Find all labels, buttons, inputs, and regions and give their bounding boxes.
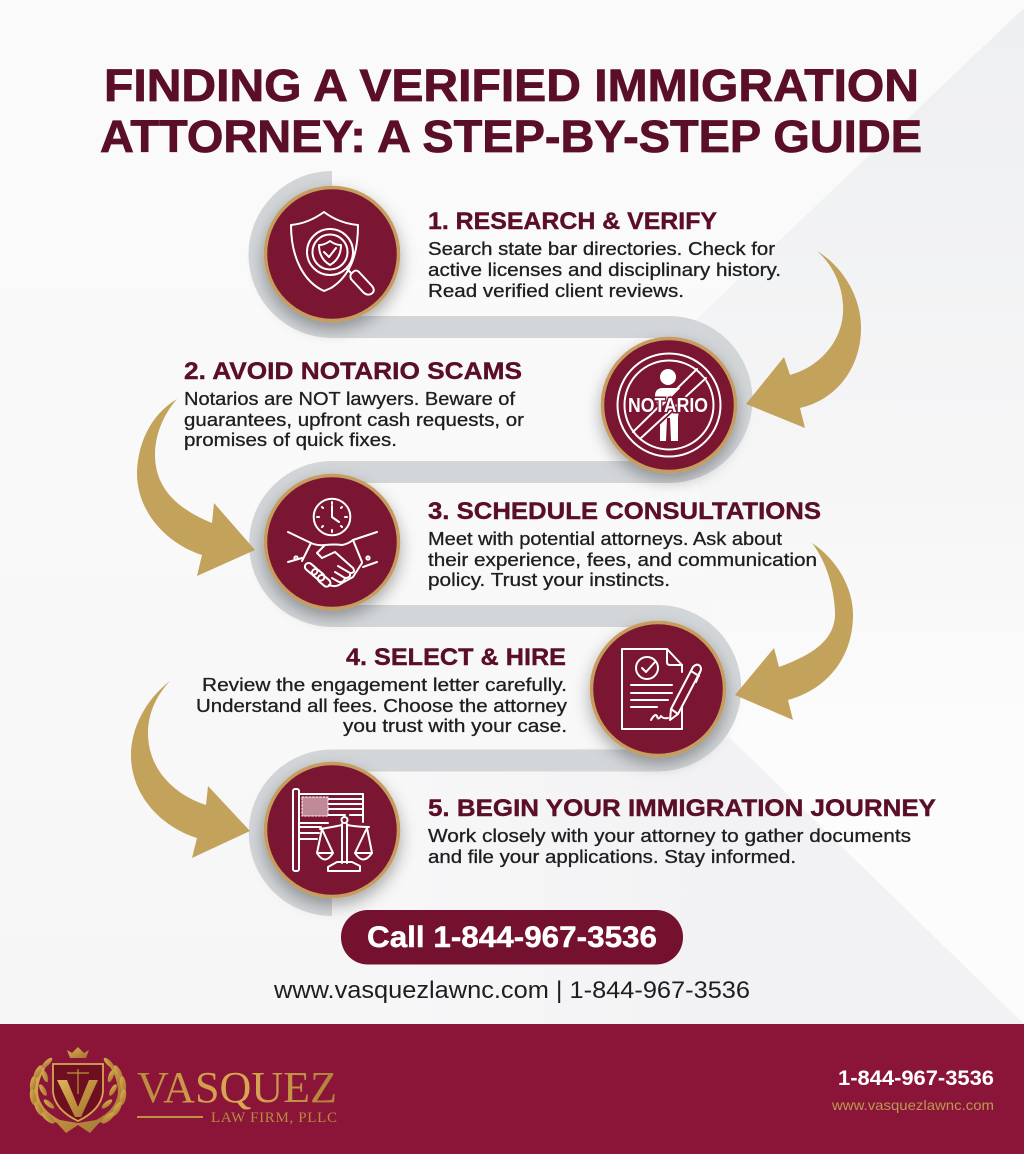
step 2 text: guarantees, upfront cash requests, or [184,409,524,430]
step 1 text: 1. RESEARCH & VERIFY [428,208,717,235]
footer phone: 1-844-967-3536 [838,1067,994,1090]
step 5 badge [266,764,398,896]
arrow: step 3 to step 4 [735,543,853,720]
icon: flag and scales of justice [293,789,372,871]
step 3 text: Meet with potential attorneys. Ask about [428,528,782,549]
title [100,60,922,162]
step 3 text: 3. SCHEDULE CONSULTATIONS [428,498,821,525]
arrow: step 4 to step 5 [131,681,250,858]
logo wordmark: VASQUEZ [137,1063,337,1112]
logo: Vasquez Law Firm crest [29,1047,127,1133]
footer website: www.vasquezlawnc.com [831,1097,994,1113]
footer band [0,1024,1024,1154]
step 4 text: you trust with your case. [343,715,567,736]
step 2 text: 2. AVOID NOTARIO SCAMS [184,358,522,385]
step 1 text: Read verified client reviews. [428,280,684,301]
step 1 text [428,208,781,301]
winding grey path track [260,182,742,905]
call button: Call 1-844-967-3536 [367,921,657,954]
arrow: step 1 to step 2 [746,251,861,428]
icon: shield with magnifier [291,212,374,295]
step 1 badge [266,188,398,320]
step 4 text: Understand all fees. Choose the attorney [196,695,568,716]
logo wordmark: LAW FIRM, PLLC [211,1110,337,1126]
step 2 text: Notarios are NOT lawyers. Beware of [184,388,516,409]
shield [53,1064,103,1121]
step 5 text [428,795,936,867]
crown [67,1047,89,1058]
step 3 text: their experience, fees, and communication [428,549,817,570]
contact line: www.vasquezlawnc.com | 1-844-967-3536 [273,977,750,1004]
step 2 badge [602,338,736,472]
step 2 text [184,358,524,450]
icon: no notario: NOTARIO [628,394,708,417]
title: FINDING A VERIFIED IMMIGRATION [104,60,919,111]
arrow: step 2 to step 3 [137,399,255,576]
icon: clock and handshake [288,499,377,588]
step 3 text [428,498,821,590]
step 1 text: active licenses and disciplinary history. [428,259,781,280]
title: ATTORNEY: A STEP-BY-STEP GUIDE [100,111,922,162]
step 1 text: Search state bar directories. Check for [428,238,775,259]
step 3 text: policy. Trust your instincts. [428,569,670,590]
step 5 text: 5. BEGIN YOUR IMMIGRATION JOURNEY [428,795,936,822]
step 3 badge [266,476,398,608]
step 2 text: promises of quick fixes. [184,429,397,450]
icon: signed document and pen [622,649,701,729]
laurel wreath [29,1056,127,1133]
step 4 badge [592,622,724,756]
step 5 text: Work closely with your attorney to gather documents [428,825,911,846]
step 4 text: Review the engagement letter carefully. [202,674,567,695]
step 5 text: and file your applications. Stay informed. [428,846,796,867]
step 4 text: 4. SELECT & HIRE [346,644,566,671]
call button [341,910,683,964]
step 4 text [196,644,568,736]
